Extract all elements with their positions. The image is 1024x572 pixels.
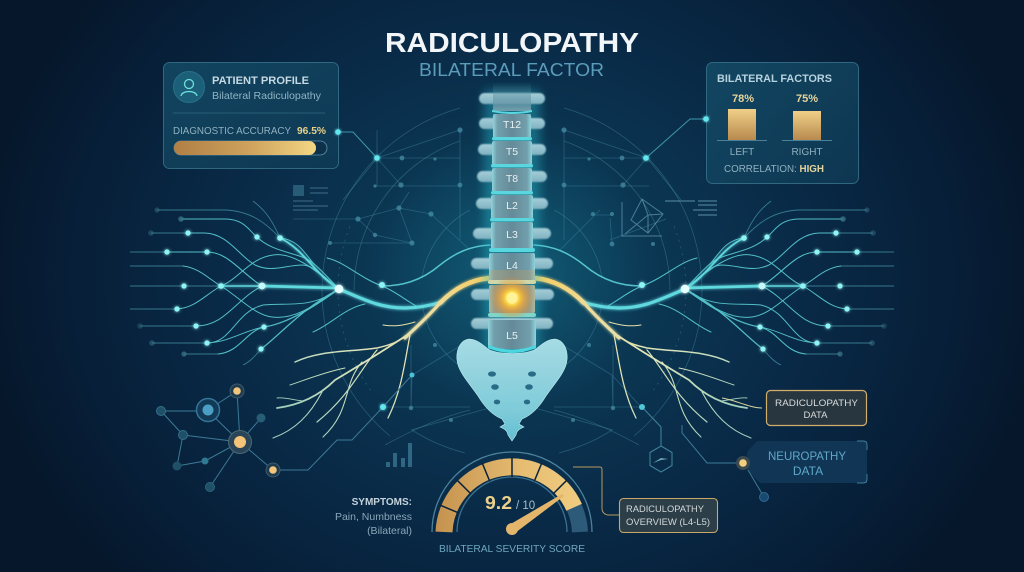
vertebra T8: T8	[506, 173, 518, 185]
vertebra L2	[476, 195, 548, 222]
icon: mini bar chart	[386, 443, 412, 467]
patient profile heading: PATIENT PROFILE	[212, 75, 309, 87]
symptoms text: Pain, Numbness	[335, 511, 412, 523]
diagnostic accuracy value: 96.5%	[297, 125, 327, 137]
icon: left report glyph	[293, 185, 328, 210]
connector and dot: neuropathy	[682, 425, 768, 502]
bar: right 75%	[782, 93, 832, 158]
callout: radiculopathy data	[722, 390, 866, 426]
vertebra T8	[477, 168, 547, 194]
icon: patient avatar	[174, 72, 204, 102]
callout: radiculopathy overview: OVERVIEW (L4-L5)	[626, 517, 710, 528]
bar: left 78%	[717, 93, 767, 158]
connector: bilateral factors to network	[643, 116, 709, 161]
left nerve tree	[130, 201, 490, 438]
glowing herniated vertebra	[471, 276, 554, 320]
spine	[457, 82, 567, 441]
background anatomical network	[293, 108, 702, 453]
correlation readout: CORRELATION: HIGH	[724, 164, 824, 175]
vertebra T12: T12	[503, 119, 521, 131]
bar: left 78%: 78%	[732, 93, 754, 105]
symptoms text	[335, 497, 412, 537]
vertebra L4: L4	[506, 260, 518, 272]
bar: right 75%: RIGHT	[791, 147, 823, 158]
vertebra L5: L5	[506, 330, 518, 342]
connector: patient profile to network	[335, 129, 380, 161]
bar: left 78%: LEFT	[730, 147, 754, 158]
symptoms text: (Bilateral)	[367, 525, 412, 537]
title: RADICULOPATHY	[385, 27, 639, 58]
icon: right chart glyph	[622, 199, 717, 236]
gauge needle	[506, 494, 564, 535]
callout: neuropathy data	[747, 441, 867, 483]
patient profile subtitle: Bilateral Radiculopathy	[212, 90, 322, 102]
bar: right 75%: 75%	[796, 93, 818, 105]
callout: radiculopathy overview: RADICULOPATHY	[626, 504, 705, 515]
callout: neuropathy data: NEUROPATHY	[768, 449, 846, 463]
gauge value: 9.2	[485, 493, 512, 513]
callout: neuropathy data: DATA	[793, 464, 823, 478]
severity gauge	[432, 452, 592, 555]
callout: radiculopathy data: DATA	[804, 410, 828, 421]
panel: bilateral factors	[706, 62, 858, 184]
gauge caption: BILATERAL SEVERITY SCORE	[439, 543, 585, 555]
top vertebra	[479, 82, 545, 114]
icon: hexagon node	[639, 404, 672, 472]
vertebra T12	[479, 114, 545, 140]
callout: radiculopathy data: RADICULOPATHY	[775, 398, 859, 409]
symptoms text: SYMPTOMS:	[352, 497, 412, 508]
spine glow	[372, 80, 652, 460]
vertebra L3	[473, 222, 551, 252]
vertebra L3: L3	[506, 229, 518, 241]
vertebra T5: T5	[506, 146, 518, 158]
sacrum	[457, 339, 567, 441]
accuracy progress bar	[174, 141, 327, 155]
right nerve tree	[534, 201, 894, 438]
bilateral factors heading: BILATERAL FACTORS	[717, 73, 832, 85]
callout: radiculopathy overview	[620, 498, 718, 532]
subtitle: BILATERAL FACTOR	[419, 59, 604, 80]
vertebra L5	[471, 318, 553, 349]
diagnostic accuracy label: DIAGNOSTIC ACCURACY	[173, 125, 291, 137]
vertebra L2: L2	[506, 200, 518, 212]
gauge denominator: / 10	[516, 500, 535, 512]
vertebra L4	[471, 253, 553, 284]
node network lower left	[156, 372, 414, 492]
connector: gauge to overview	[573, 467, 619, 515]
vertebra T5	[478, 141, 546, 168]
panel: patient profile	[164, 62, 338, 168]
